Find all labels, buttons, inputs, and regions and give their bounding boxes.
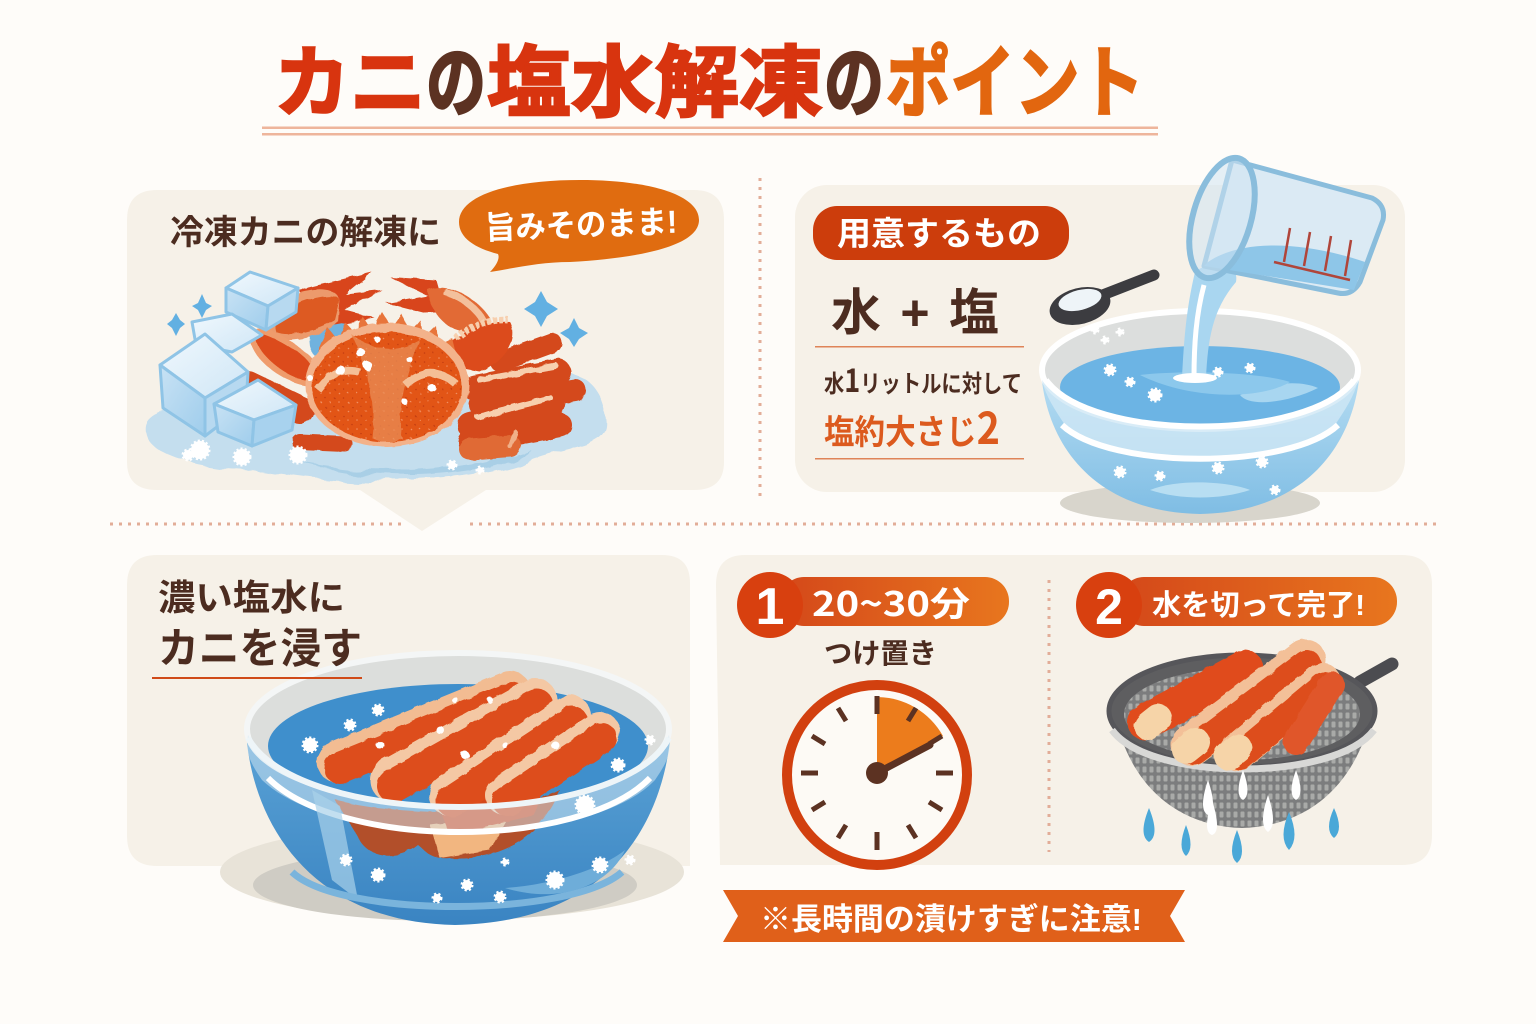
ratio line: 水1リットルに対して: [824, 356, 1022, 402]
title: [274, 39, 1144, 127]
title underline: [262, 126, 1158, 136]
salt amount: 塩約大さじ2: [824, 393, 1000, 457]
step divider: [1048, 580, 1050, 852]
salt spoon: [1046, 275, 1154, 331]
warning banner: ※長時間の漬けすぎに注意!: [760, 902, 1142, 937]
heading: frozen crab: 冷凍カニの解凍に: [170, 214, 441, 252]
step 1 badge: 1: [756, 578, 784, 636]
water drops: [1144, 770, 1339, 863]
salt in water: [303, 705, 654, 902]
panel: steps: [716, 555, 1432, 865]
water stream: [1173, 264, 1236, 383]
panel: frozen crab: [127, 180, 724, 531]
shadows: [220, 824, 684, 921]
step 1 badge: 20~30分: [812, 577, 970, 626]
step 2 badge: 水を切って完了!: [1152, 589, 1365, 622]
pill heading: [813, 206, 1069, 260]
speckle and salt on legs: [376, 697, 559, 759]
right claw: [386, 277, 512, 372]
blue bowl with crab legs: [246, 653, 671, 925]
underline: [152, 677, 362, 679]
title: ポイント: [886, 39, 1144, 127]
ice cubes: [160, 272, 298, 446]
illustration: crab on ice: [145, 272, 606, 481]
panel: soak the crab: [127, 555, 690, 925]
title: の: [426, 39, 486, 127]
title: の: [824, 39, 884, 127]
title: カニ: [274, 39, 426, 127]
title: 塩水解凍: [487, 39, 823, 127]
speech bubble: 旨みそのまま!: [485, 204, 678, 246]
icy puddle: [145, 318, 606, 481]
submerged legs: [335, 780, 560, 858]
left claw: [250, 272, 382, 386]
heading: soak crab: カニを浸す: [158, 625, 362, 672]
pill heading: 用意するもの: [837, 215, 1041, 252]
water plus salt: 水 + 塩: [831, 285, 999, 341]
salt flakes: [183, 441, 483, 473]
panel: what to prepare: [795, 150, 1405, 523]
crab shell: [305, 312, 469, 447]
bowl of water: [1041, 311, 1360, 523]
crab legs above water: [338, 692, 602, 801]
divider lines: [110, 178, 1442, 524]
sparkles: [167, 291, 588, 347]
step 2 badge: [1076, 572, 1397, 638]
rim and glass bands: [247, 735, 670, 832]
soak label: つけ置き: [824, 638, 937, 669]
speech bubble: [459, 180, 699, 272]
heading: salty water: 濃い塩水に: [158, 577, 345, 618]
step 1 badge: [737, 572, 1009, 638]
rule: [815, 458, 1024, 460]
rule: [815, 346, 1024, 348]
colander with drained crab: [1109, 655, 1392, 828]
step 2 badge: 2: [1095, 579, 1123, 635]
measuring cup: [1177, 150, 1384, 294]
warning banner: [723, 890, 1185, 942]
crab legs: [248, 343, 575, 449]
clock: [787, 685, 967, 865]
